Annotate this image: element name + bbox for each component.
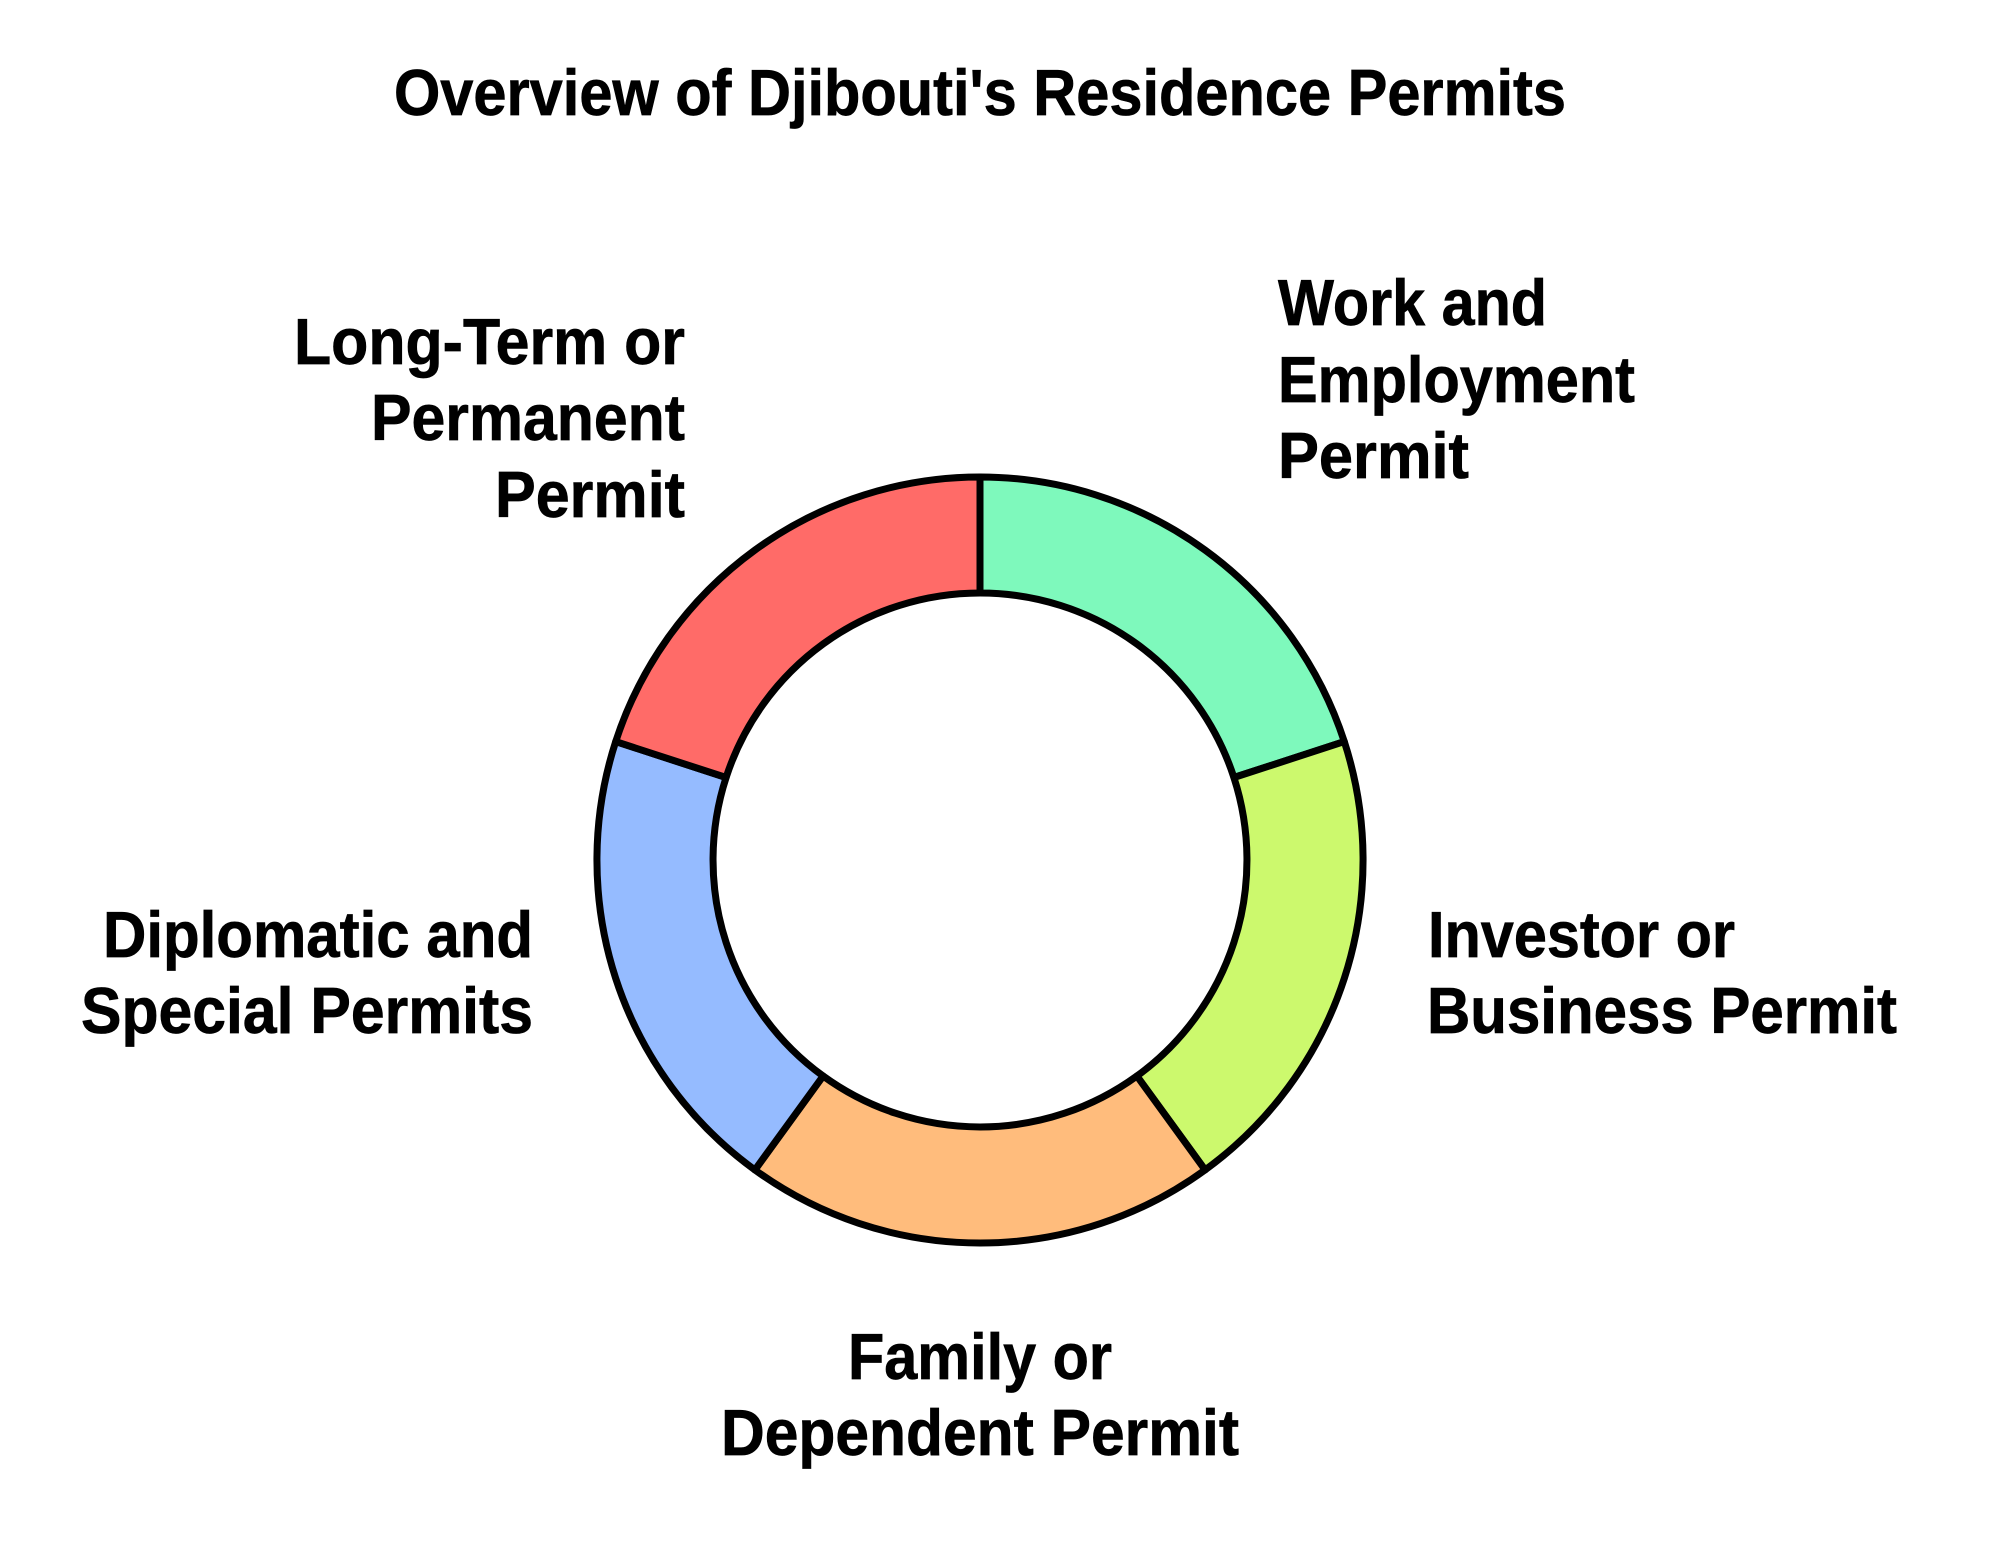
label: long-term or permanent permit: Permanent	[371, 381, 685, 454]
label: family or dependent permit	[721, 1320, 1239, 1469]
label: long-term or permanent permit: Permit	[495, 458, 685, 531]
label: work and employment permit: Permit	[1278, 419, 1469, 492]
segment: long-term or permanent permit	[616, 477, 980, 778]
segment: work and employment permit	[980, 477, 1344, 778]
label: diplomatic and special permits: Diplomatic and	[103, 898, 533, 971]
label: family or dependent permit: Family or	[848, 1320, 1112, 1393]
label: investor or business permit: Investor or	[1428, 898, 1735, 971]
segment: family or dependent permit	[755, 1076, 1205, 1243]
label: diplomatic and special permits: Special Permits	[81, 974, 533, 1047]
segment: diplomatic and special permits	[597, 742, 823, 1170]
label: diplomatic and special permits	[81, 898, 533, 1047]
label: work and employment permit: Employment	[1278, 343, 1635, 416]
label: work and employment permit: Work and	[1278, 266, 1547, 339]
donut chart	[597, 477, 1363, 1243]
label: investor or business permit	[1427, 898, 1897, 1047]
label: family or dependent permit: Dependent Permit	[721, 1396, 1239, 1469]
label: work and employment permit	[1278, 266, 1635, 492]
label: investor or business permit: Business Permit	[1427, 974, 1897, 1047]
title: Overview of Djibouti's Residence Permits	[394, 56, 1566, 129]
label: long-term or permanent permit: Long-Term or	[294, 305, 685, 378]
segment: investor or business permit	[1137, 742, 1363, 1170]
label: long-term or permanent permit	[294, 305, 685, 531]
